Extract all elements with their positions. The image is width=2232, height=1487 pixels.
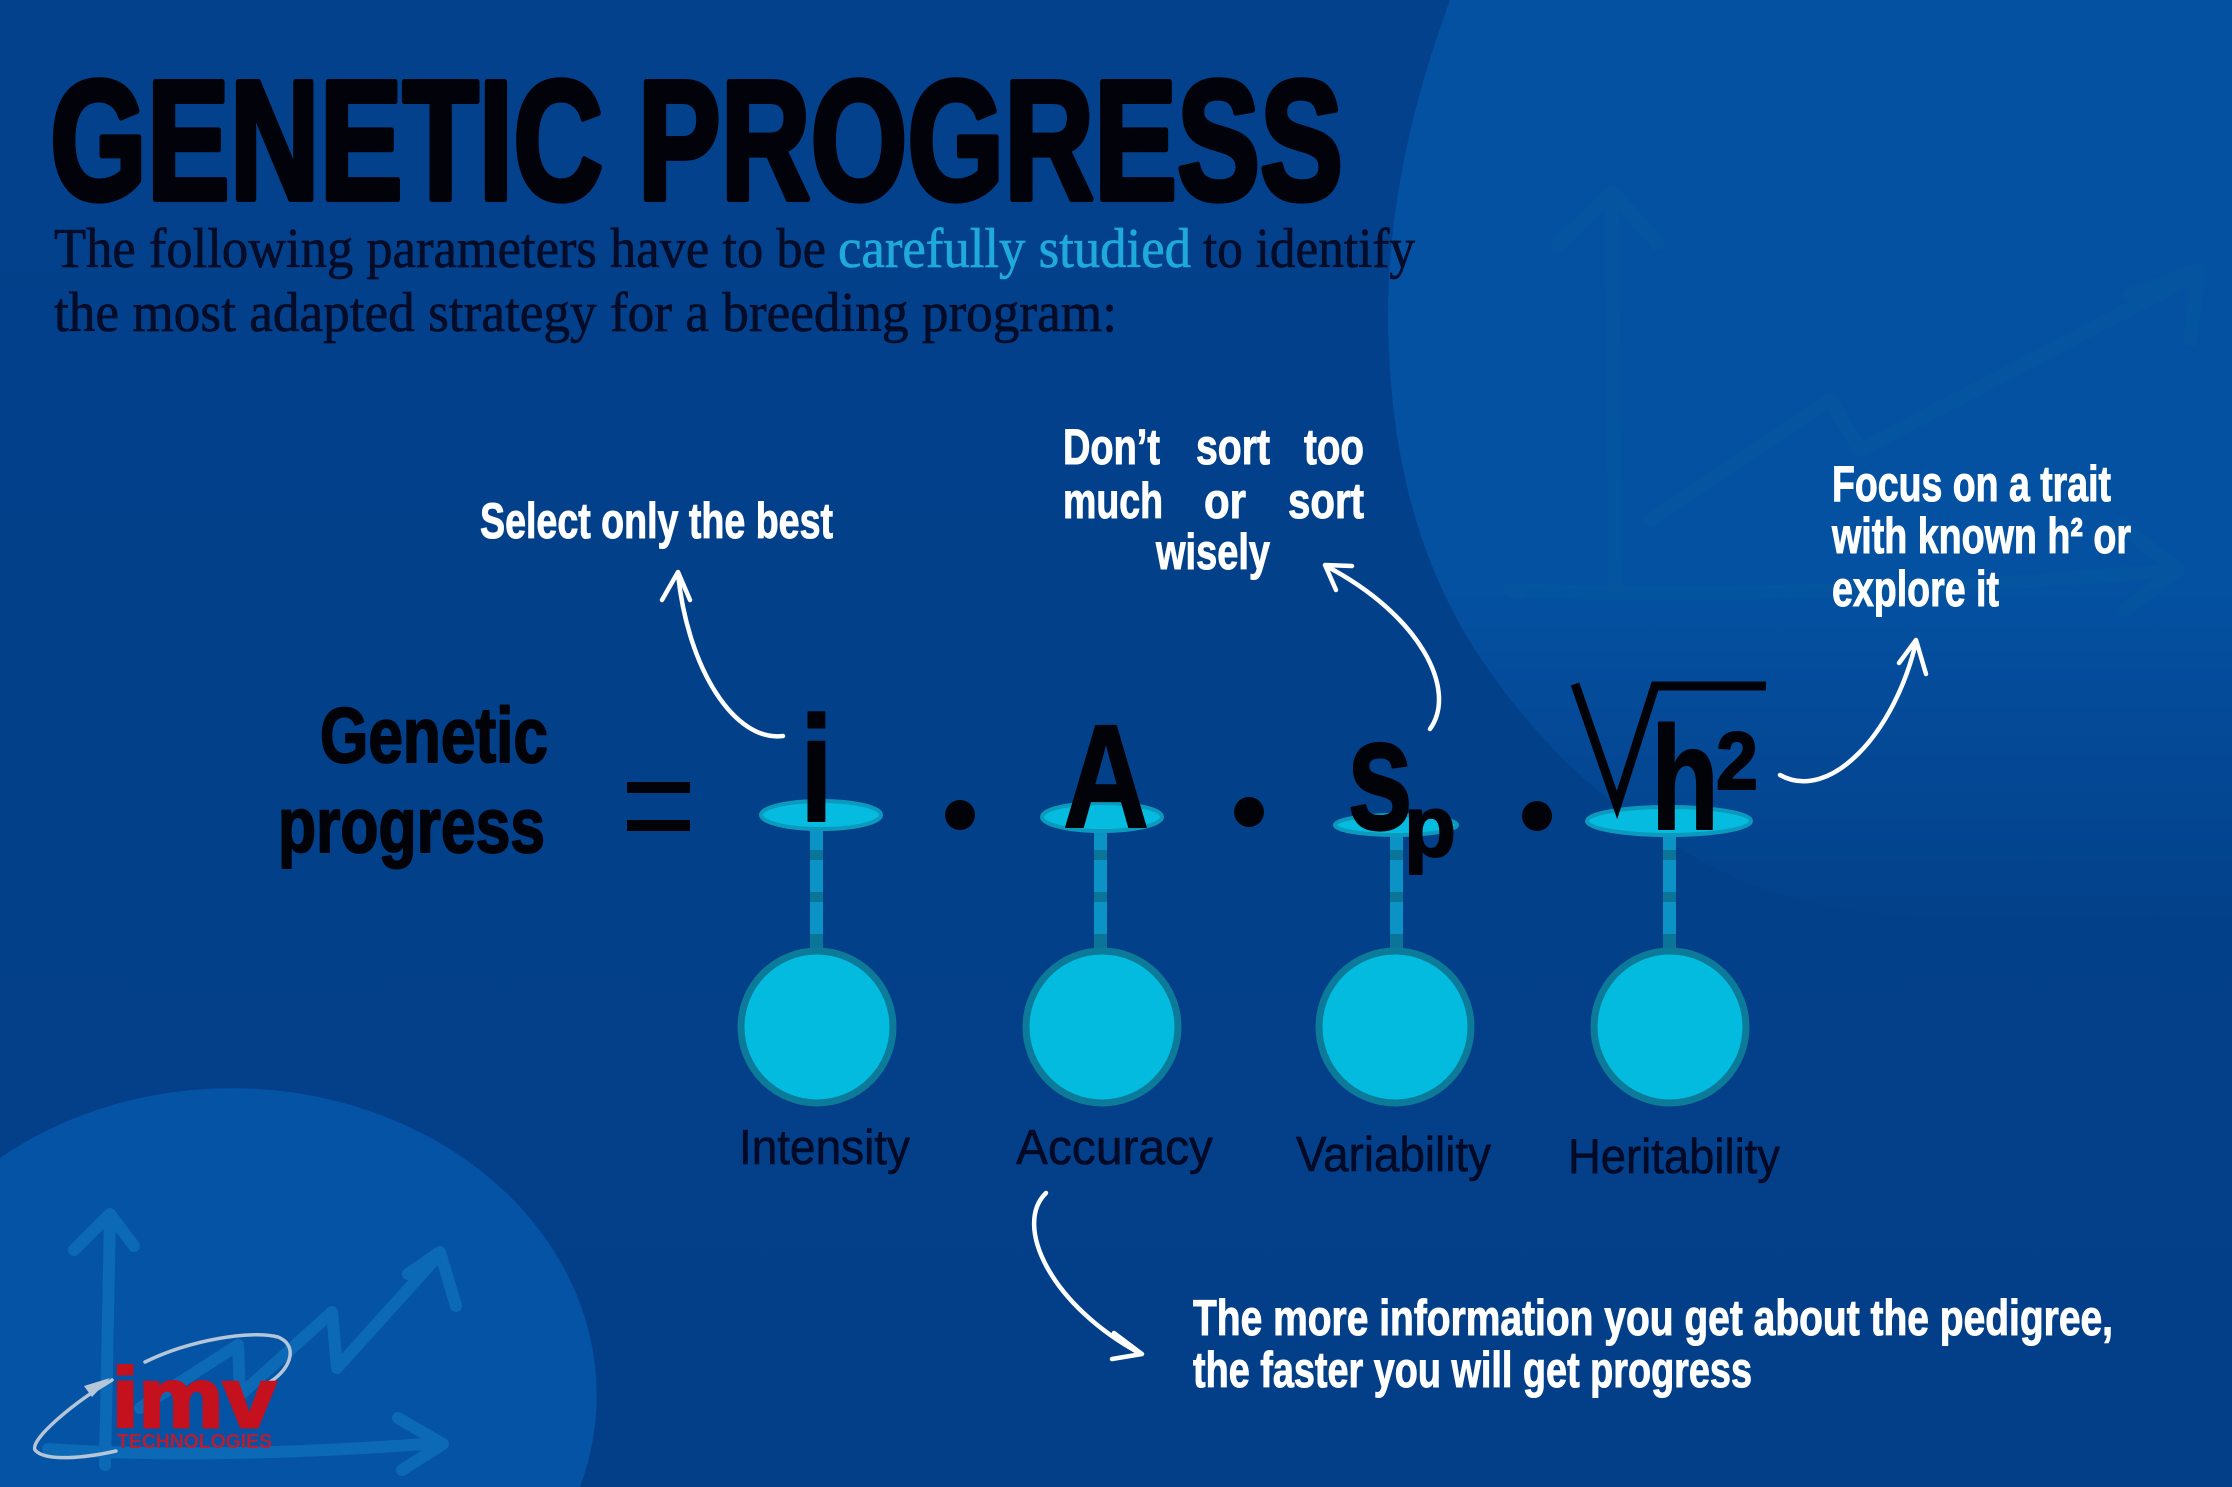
watermark: upper right chart arrows [1510,192,2198,610]
label: Variability: Variability [1296,1128,1491,1182]
callout: focus on a trait: explore it [1832,561,1999,617]
callout: don't sort too much: wisely [1155,524,1270,580]
top ellipse: Accuracy [1042,803,1162,831]
callout: focus on a trait: with known h² or [1831,508,2131,564]
stem: Accuracy [1094,828,1107,950]
dot operator 2 [1234,797,1264,827]
circle: Variability [1319,951,1471,1103]
arrow: accuracy callout [1325,565,1439,729]
stem: Intensity [810,828,823,950]
logo swoosh arrowhead [84,1378,110,1397]
callout: pedigree information [1193,1290,2113,1398]
callout: focus on a trait [1831,456,2131,617]
dot operator 3 [1522,801,1552,831]
arrow: intensity callout [662,572,783,736]
top ellipse: Variability [1335,815,1457,835]
callout: pedigree information: the faster you will get progress [1193,1342,1752,1398]
callout: don't sort too much: sort [1288,473,1364,529]
symbol: i: i [800,685,833,853]
logo tagline: TECHNOLOGIES [117,1431,272,1453]
parameter: Heritability [1568,684,1780,1184]
circle: Accuracy [1026,951,1178,1103]
symbol: h: h [1651,697,1719,861]
callout: don't sort too much: Don’t [1063,419,1160,475]
subtitle text block: carefully studied [838,218,1191,280]
parameter: Intensity [739,685,910,1175]
circle: Heritability [1594,951,1746,1103]
symbol: subscript p: p [1404,779,1456,875]
symbol: s: s [1347,684,1413,863]
square root sign [1575,684,1766,805]
callout: focus on a trait: Focus on a trait [1832,456,2111,512]
watermark: lower left chart arrows [48,1214,456,1470]
arrow: heritability callout [1780,640,1926,781]
title: GENETIC PROGRESS [50,46,1343,236]
equals sign [627,782,690,831]
subtitle text block: The following parameters have to be [54,218,826,280]
logo swoosh [35,1335,290,1458]
parameter: Accuracy [1016,695,1213,1175]
stem: Heritability [1663,832,1676,950]
callout: don't sort too much: much [1063,473,1163,529]
callout: don't sort too much: or [1204,473,1246,529]
circle: Intensity [741,951,893,1103]
formula label: Genetic progress [278,691,548,869]
parameter: Variability [1296,684,1491,1182]
formula label: Genetic progress: progress [278,781,545,869]
label: Intensity: Intensity [739,1121,910,1175]
stem: Variability [1390,830,1403,950]
label: Heritability: Heritability [1568,1130,1780,1184]
arrow: pedigree callout [1034,1193,1142,1359]
callout: don't sort too much: sort [1196,419,1270,475]
dot operator 1 [945,800,975,830]
logo: IMV Technologies [35,1335,290,1458]
label: Accuracy: Accuracy [1016,1121,1213,1175]
top ellipse: Intensity [761,801,881,829]
symbol: A: A [1063,695,1149,859]
callout: select only the best: Select only the best [480,493,833,549]
background shape: lower left circle [0,1088,597,1487]
subtitle text block [54,218,1415,344]
top ellipse: Heritability [1587,807,1751,835]
symbol: superscript 2: 2 [1716,716,1758,807]
formula label: Genetic progress: Genetic [320,691,548,779]
callout: don't sort too much [1063,419,1364,580]
background shape: upper right circle [1388,0,2232,930]
subtitle text block: to identify [1203,218,1415,280]
subtitle text block: the most adapted strategy for a breeding program: [54,282,1117,344]
logo wordmark: imv [112,1351,276,1445]
callout: don't sort too much: too [1304,419,1364,475]
